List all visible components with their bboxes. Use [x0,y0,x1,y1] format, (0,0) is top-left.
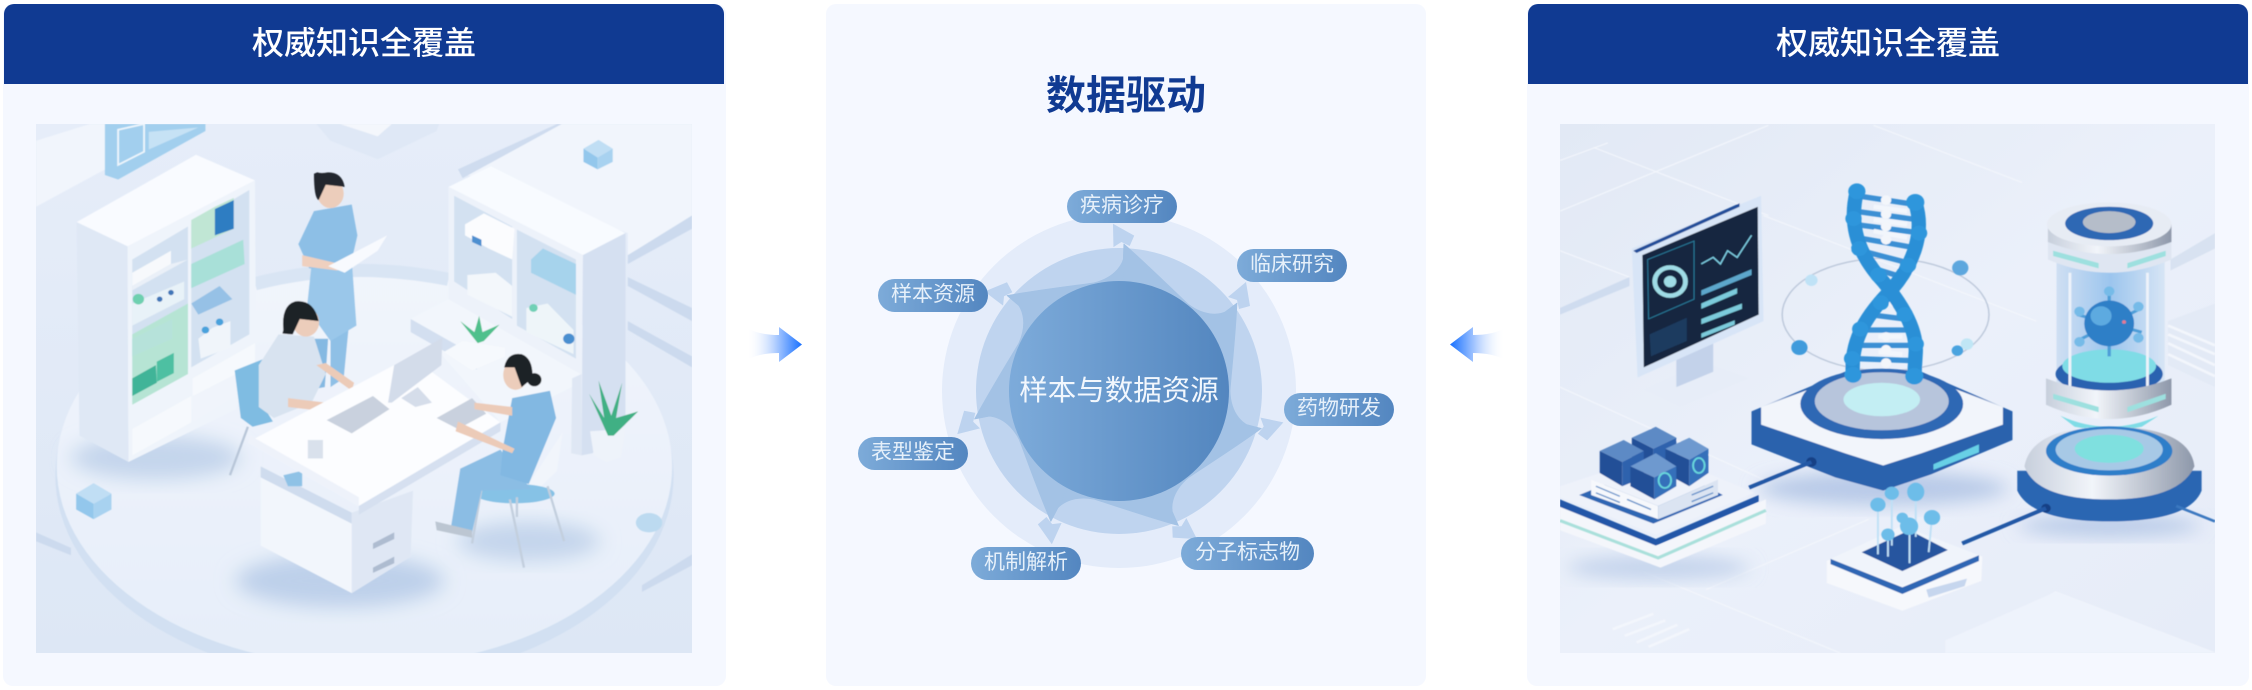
heading: center: 数据驱动 [1046,74,1206,118]
pill: disease diagnosis: 疾病诊疗 [1080,194,1164,217]
cube bottom left [76,483,112,519]
side desk and small plant [411,299,582,455]
pill: mechanism analysis: 机制解析 [984,551,1068,574]
panel: center data-driven [826,4,1426,686]
center label: 样本与数据资源 [1019,375,1219,407]
seated nurse right [435,354,564,568]
connector lines [1749,462,2046,543]
pill: phenotype identification [858,437,968,470]
sample chip [1827,483,1982,611]
left cabinet [77,155,256,462]
pill: drug development: 药物研发 [1297,397,1381,420]
panel: left [3,4,726,686]
storage cubes platform [1560,427,1766,568]
floor tiles [1560,125,2215,653]
panel: right [1527,4,2249,686]
monitor [1632,196,1763,407]
cube top right [583,140,613,169]
right cabinet [448,166,625,455]
capsule base [2017,426,2215,521]
arrow: right pointing [756,327,802,362]
etched stripes [1613,326,2215,647]
pill: clinical research [1237,249,1347,282]
orbit ring [1782,258,1989,371]
central platform [1752,369,2012,491]
standing nurse [298,172,387,389]
heading: right panel [1528,4,2248,84]
heading: left panel [4,4,724,84]
diagram: pinwheel of seven arrows [942,220,1296,568]
pill: clinical research: 临床研究 [1250,253,1334,276]
pill: sample resources: 样本资源 [891,283,975,306]
illustration: biotech lab with DNA [1560,124,2215,653]
seated nurse left: chair and figure [230,301,354,475]
heading: left panel: 权威知识全覆盖 [252,25,476,61]
pill: drug development [1284,393,1394,426]
illustration: medical staff in clinic [36,124,692,653]
capsule with virus [2046,202,2171,430]
pill: biomarkers [1181,537,1314,570]
main desk [248,338,500,593]
pill: phenotype identification: 表型鉴定 [871,441,955,464]
platform disc [55,266,674,681]
pill: sample resources [878,279,988,312]
arrow: left pointing [1450,327,1496,362]
potted plant [589,381,638,462]
DNA helix [1844,183,1927,385]
pill: mechanism analysis [971,547,1081,580]
pill: disease diagnosis [1067,190,1177,223]
heading: right panel: 权威知识全覆盖 [1776,25,2000,61]
pill: biomarkers: 分子标志物 [1195,541,1300,564]
sign board [105,124,205,179]
